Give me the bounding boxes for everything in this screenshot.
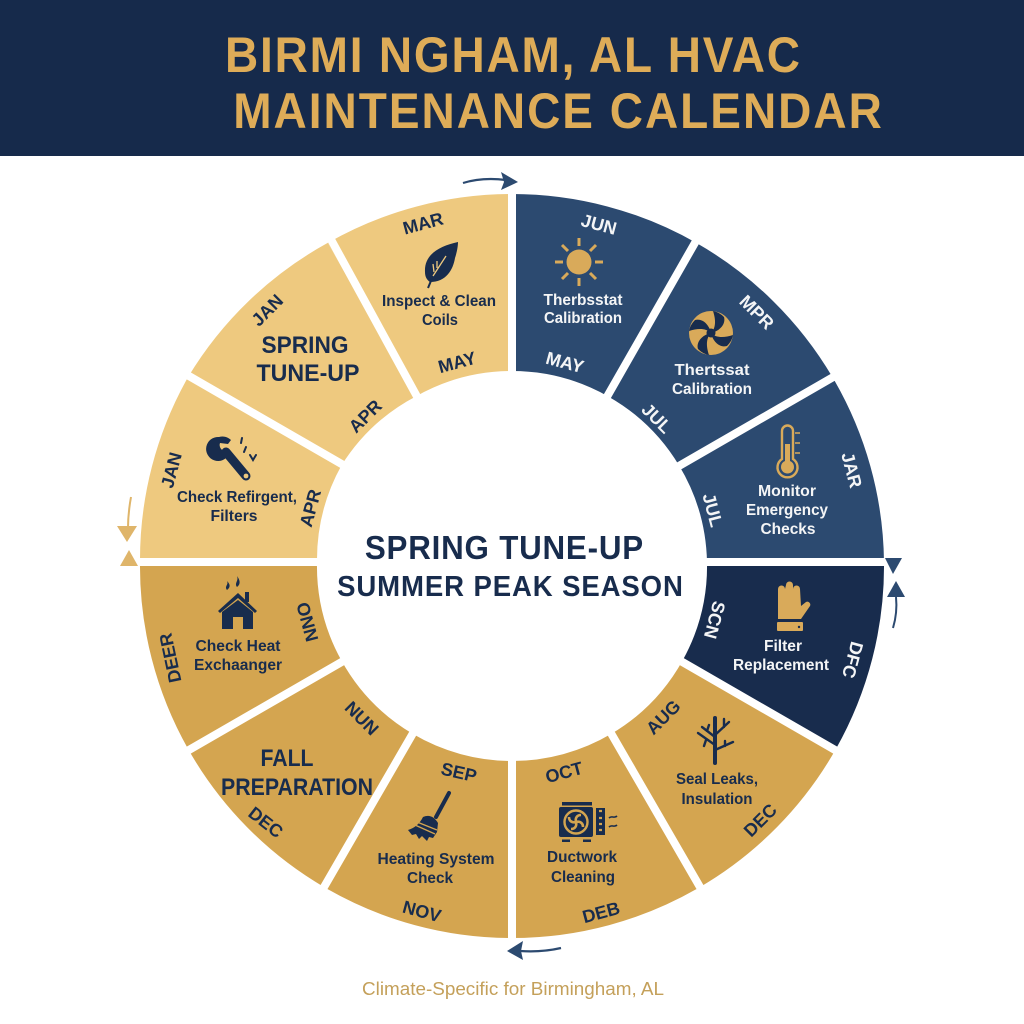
title <box>225 28 882 139</box>
month label SEP: SEP <box>439 759 479 786</box>
task text: Inspect & Clean <box>382 293 496 310</box>
task text: Calibration <box>672 381 752 398</box>
center title: SPRING TUNE-UP <box>365 529 643 566</box>
icon: thermometer <box>778 426 800 477</box>
icon: sun <box>555 238 603 286</box>
month label MAY: MAY <box>544 348 586 377</box>
task text: Emergency <box>746 502 828 519</box>
segment <box>324 734 512 938</box>
icon: glove <box>777 582 810 631</box>
icon: bare tree <box>698 718 733 763</box>
heading <box>221 745 373 801</box>
segment <box>512 734 700 938</box>
title: BIRMI NGHAM, AL HVAC <box>225 28 800 83</box>
task text <box>378 851 494 887</box>
task text <box>382 293 496 329</box>
task text: Monitor <box>758 483 816 500</box>
segment <box>512 194 696 396</box>
task text: Exchaanger <box>194 657 282 674</box>
title: MAINTENANCE CALENDAR <box>233 84 882 139</box>
segment <box>188 243 416 466</box>
task text <box>544 292 623 327</box>
icon: wrench <box>206 436 256 478</box>
month label DEC: DEC <box>245 803 287 842</box>
arrow: left side <box>117 497 138 566</box>
segment <box>140 562 341 749</box>
segment <box>608 243 832 466</box>
task text: Check Heat <box>196 638 281 655</box>
task text: Ductwork <box>547 849 617 866</box>
segment <box>679 377 884 562</box>
task text: Therbsstat <box>544 292 623 309</box>
segment <box>188 660 413 887</box>
task text <box>676 771 758 808</box>
month label SCN: SCN <box>700 599 729 641</box>
heading: SPRING <box>262 332 348 359</box>
task text: Filter <box>764 638 802 655</box>
task text <box>733 638 830 674</box>
segment <box>140 377 341 562</box>
month label MPR: MPR <box>735 291 778 334</box>
header banner <box>0 0 1024 156</box>
panel: check heat exchanger <box>140 562 341 749</box>
panel: thermostat calibration fan <box>608 243 832 466</box>
task text: Filters <box>210 508 258 525</box>
segment <box>611 660 836 887</box>
month label DFC: DFC <box>838 639 867 680</box>
center title <box>337 529 683 602</box>
task text <box>177 489 297 525</box>
month label JUL: JUL <box>698 491 727 529</box>
month label OCT: OCT <box>543 758 585 787</box>
task text <box>547 849 617 886</box>
month label DEER: DEER <box>156 631 185 684</box>
month label MAY: MAY <box>436 348 478 377</box>
month label JUL: JUL <box>638 399 676 437</box>
month label JAR: JAR <box>837 450 866 490</box>
panel: seal leaks, insulation <box>611 660 836 887</box>
arrow: top <box>463 172 518 190</box>
task text: Checks <box>760 521 816 538</box>
icon: fan <box>689 311 733 355</box>
month label NUN: NUN <box>341 697 383 739</box>
panel: filter replacement <box>683 562 884 749</box>
task text: Thertssat <box>674 362 750 379</box>
task text <box>672 362 752 398</box>
month label APR: APR <box>345 396 386 437</box>
arrow: bottom <box>507 941 561 960</box>
calendar wheel <box>132 186 892 946</box>
heading: TUNE-UP <box>256 360 360 387</box>
panel: monitor emergency checks <box>679 377 884 562</box>
task text: Cleaning <box>551 869 615 886</box>
panel: June thermostat calibration <box>512 194 696 396</box>
segment <box>683 562 884 749</box>
panel: fall preparation <box>188 660 413 887</box>
panel: ductwork cleaning <box>512 734 700 938</box>
icon: leaf <box>425 242 458 288</box>
month label JUN: JUN <box>579 210 619 239</box>
month label DEB: DEB <box>580 898 622 927</box>
heading: PREPARATION <box>221 774 373 801</box>
month label JAN: JAN <box>157 450 186 490</box>
icon: house with smoke <box>218 576 257 629</box>
task text: Check Refirgent, <box>177 489 297 506</box>
month label MAR: MAR <box>401 209 446 238</box>
month label JAN: JAN <box>248 291 287 330</box>
month label NOV: NOV <box>400 897 443 926</box>
task text: Calibration <box>544 310 622 327</box>
task text <box>194 638 282 674</box>
heading <box>256 332 360 387</box>
month label AUG: AUG <box>642 696 685 739</box>
task text: Replacement <box>733 657 830 674</box>
task text: Seal Leaks, <box>676 771 758 788</box>
month label DEC: DEC <box>740 800 781 841</box>
task text: Insulation <box>682 791 752 808</box>
task text: Heating System <box>378 851 494 868</box>
panel: inspect and clean coils <box>328 194 512 396</box>
arrow: right side <box>885 558 905 628</box>
icon: HVAC unit <box>559 802 617 842</box>
segment <box>328 194 512 396</box>
heading: FALL <box>260 745 314 772</box>
panel: check refrigerant, filters <box>140 377 341 562</box>
panel: heating system check <box>324 734 512 938</box>
task text: Check <box>407 870 453 887</box>
icon: broom <box>408 793 449 841</box>
task text: Coils <box>422 312 458 329</box>
footer note: Climate-Specific for Birmingham, AL <box>362 979 664 999</box>
month label APR: APR <box>296 487 325 529</box>
task text <box>746 483 828 538</box>
center title: SUMMER PEAK SEASON <box>337 569 683 602</box>
month label NNO: NNO <box>293 600 322 644</box>
panel: spring tune-up <box>188 243 416 466</box>
